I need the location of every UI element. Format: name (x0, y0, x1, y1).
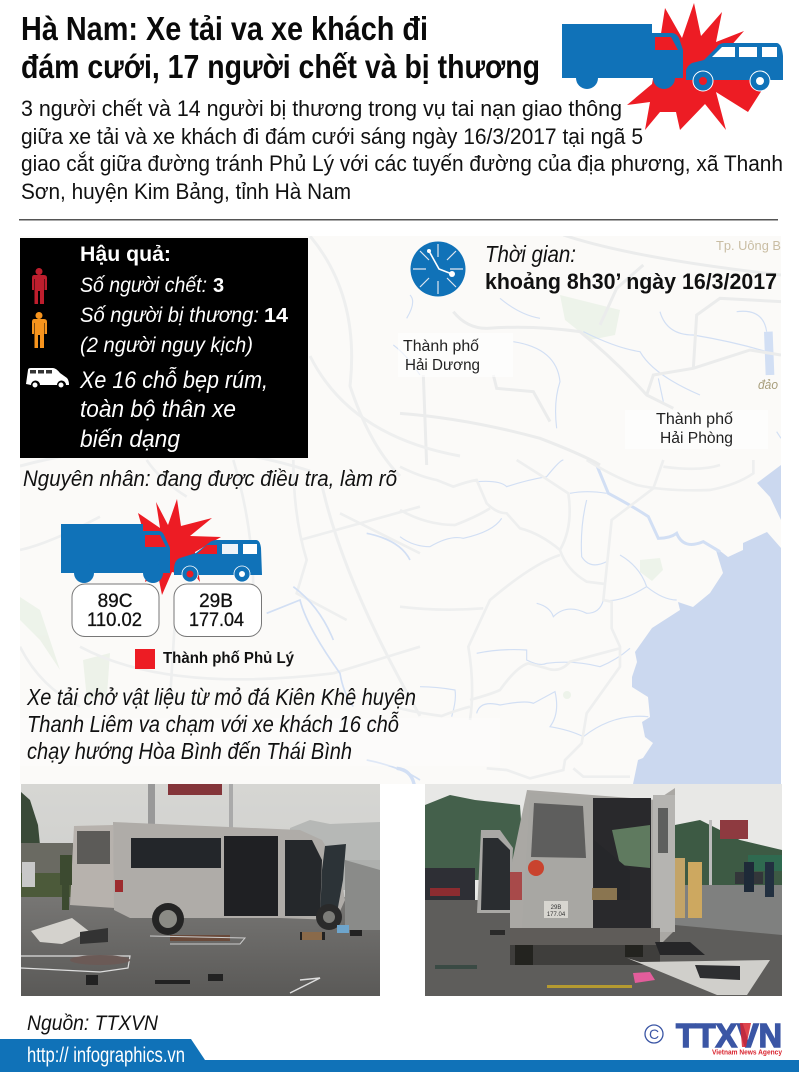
icon: red person (32, 268, 47, 304)
description text: Xe tải chở vật liệu từ mỏ đá Kiên Khê huyện (26, 684, 416, 710)
map: upper right roads (400, 235, 781, 465)
icon: small truck and bus collision (61, 499, 262, 595)
plate: bus (174, 584, 262, 636)
label: Thành phố Hải Dương: Hải Dương (405, 357, 480, 374)
photo: rear of crashed van (425, 784, 782, 996)
description text (26, 684, 416, 764)
label: Thành phố Hải Phòng: Hải Phòng (660, 430, 733, 447)
intro text: 3 người chết và 14 người bị thương trong vụ tai nạn giao thông (21, 96, 622, 121)
logo: TTXVN: TTXVN (676, 1017, 782, 1054)
panel: consequences: 3 (213, 275, 224, 297)
label: Thành phố Hải Dương (403, 338, 480, 374)
plate: truck: 89C (98, 591, 132, 612)
intro text: Sơn, huyện Kim Bảng, tỉnh Hà Nam (21, 179, 351, 204)
title (21, 10, 540, 85)
panel: consequences (20, 238, 308, 458)
marker: Thành phố Phủ Lý (135, 649, 155, 669)
label: Tp. Uông B: Tp. Uông B (716, 238, 781, 253)
injured: Số người bị thương: (80, 304, 259, 327)
plate: bus: 177.04 (189, 610, 244, 631)
critical: (2 người nguy kịch) (80, 334, 253, 357)
plate: truck (72, 584, 159, 636)
label: đảo: đảo (758, 377, 778, 392)
map: rivers right (397, 460, 720, 790)
icon: orange person (32, 312, 47, 348)
source: Nguồn: TTXVN (27, 1012, 159, 1035)
logo: TTXVN: Vietnam News Agency (712, 1048, 783, 1056)
van damage text (79, 366, 268, 453)
deaths: Số người chết: (80, 274, 207, 297)
intro text: giữa xe tải và xe khách đi đám cưới sáng ngày 16/3/2017 tại ngã 5 (21, 124, 643, 149)
photo: side of crashed van (21, 784, 380, 996)
photo: rear of crashed van: 177.04 (547, 912, 566, 918)
title: đám cưới, 17 người chết và bị thương (21, 48, 540, 85)
icon: white van (26, 368, 69, 388)
map: whitish label panels (398, 348, 495, 377)
title: Hà Nam: Xe tải va xe khách đi (21, 10, 428, 47)
time value: khoảng 8h30’ ngày 16/3/2017 (485, 269, 777, 294)
heading: Hậu quả: Hậu quả: (80, 243, 171, 266)
panel: consequences: 14 (264, 305, 289, 327)
description text: Thanh Liêm va chạm với xe khách 16 chỗ (27, 710, 399, 737)
icon: truck and bus collision (562, 3, 783, 130)
logo: TTXVN: C (649, 1026, 659, 1042)
map: green areas (20, 295, 663, 700)
plate: bus: 29B (199, 591, 233, 612)
icon: clock (410, 242, 466, 296)
time heading: Thời gian: (485, 241, 576, 267)
map: sea (632, 465, 781, 784)
cause text: Nguyên nhân: đang được điều tra, làm rõ (23, 466, 397, 491)
photo: rear of crashed van: 29B (551, 905, 561, 911)
plate: truck: 110.02 (87, 610, 142, 631)
label: Thành phố Phủ Lý: Thành phố Phủ Lý (163, 650, 294, 667)
van damage text: biến dạng (80, 426, 181, 453)
van damage text: toàn bộ thân xe (80, 396, 236, 423)
van damage text: Xe 16 chỗ bẹp rúm, (79, 366, 268, 394)
intro text (21, 96, 783, 204)
label: Thành phố Hải Phòng (656, 411, 733, 447)
map: roads right (400, 460, 753, 778)
description text: chạy hướng Hòa Bình đến Thái Bình (27, 738, 352, 764)
map: left roads and rivers (20, 460, 420, 780)
footer bar (0, 1039, 799, 1072)
label: Thành phố Hải Dương: Thành phố (403, 338, 479, 355)
label: Thành phố Hải Phòng: Thành phố (656, 411, 733, 428)
panel: map background (20, 235, 781, 790)
map: upper right rivers (393, 295, 781, 438)
website: http:// infographics.vn (27, 1044, 185, 1067)
